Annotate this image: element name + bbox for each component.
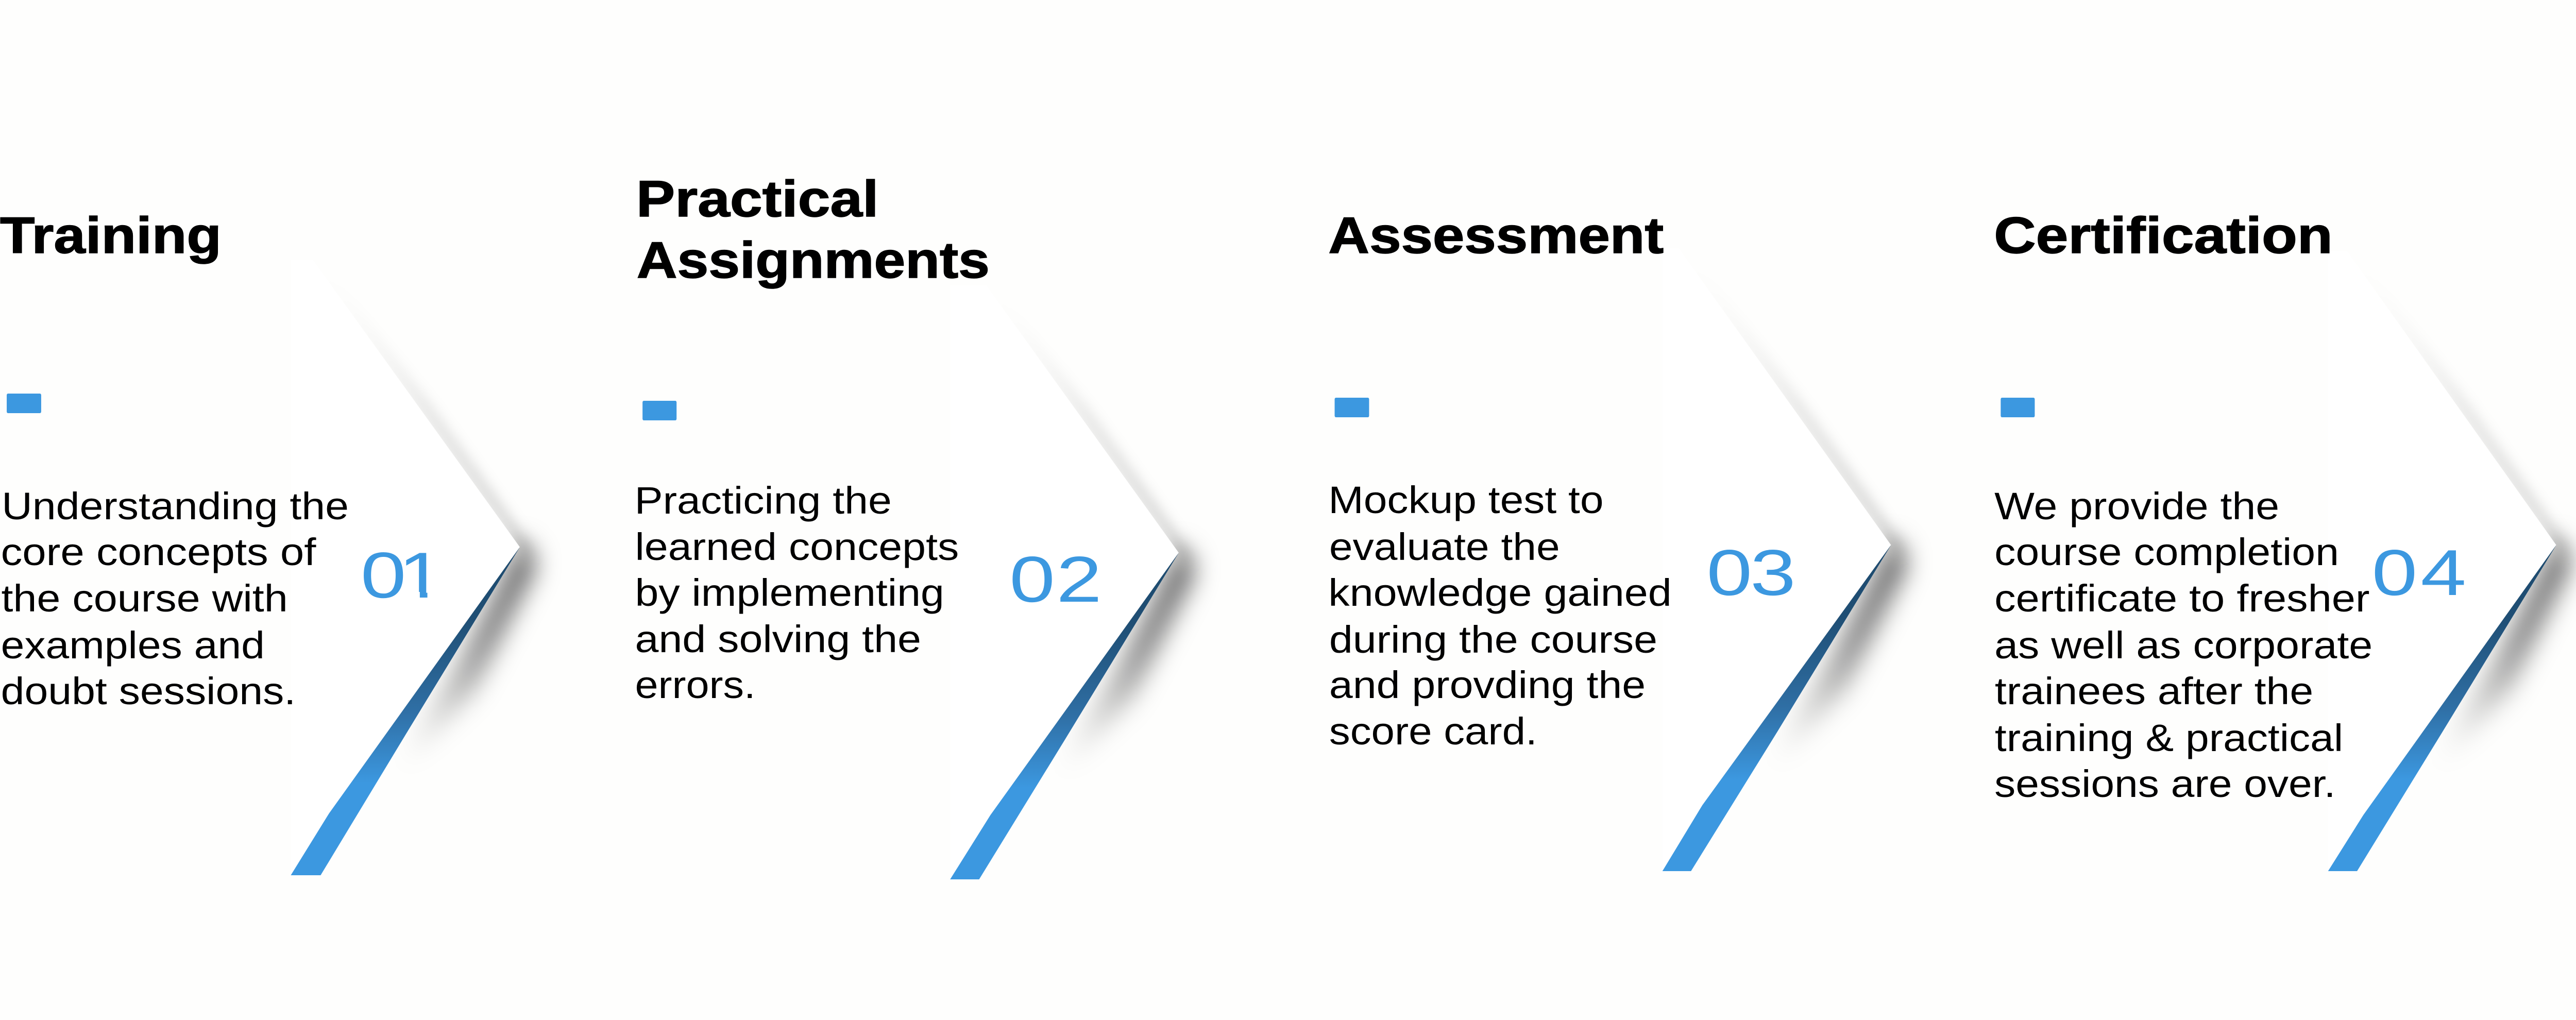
body text 3: Mockup test to: [1328, 479, 1604, 521]
chevron 3 with shadow and blue ribbon: [1663, 248, 1911, 871]
step number 01: 01: [361, 539, 444, 611]
body text 3: knowledge gained: [1328, 572, 1672, 614]
body text 2: Practicing the: [635, 480, 892, 522]
body text 4: We provide the: [1994, 485, 2279, 528]
step number 03: 03: [1706, 537, 1796, 609]
heading: Assessment: Assessment: [1328, 207, 1664, 264]
panel: step 1 training: [0, 207, 540, 875]
heading: Certification: Certification: [1994, 207, 2333, 264]
body text 3: during the course: [1329, 619, 1657, 661]
body text 3: score card.: [1329, 710, 1537, 753]
body text 1: doubt sessions.: [1, 670, 296, 712]
heading: Practical Assignments: [636, 171, 990, 289]
body text 4: [1994, 485, 2372, 805]
body text 3: evaluate the: [1329, 526, 1560, 568]
body text 4: training & practical: [1995, 717, 2343, 759]
accent dash 4: [2001, 398, 2035, 417]
step number 02: 02: [1009, 543, 1102, 616]
panel: step 2 practical assignments: [635, 171, 1199, 879]
body text 2: by implementing: [635, 572, 944, 614]
body text 2: [635, 480, 959, 706]
body text 3: [1328, 479, 1672, 753]
body text 4: as well as corporate: [1994, 624, 2372, 667]
body text 1: [1, 485, 349, 712]
body text 4: course completion: [1994, 531, 2339, 573]
body text 1: examples and: [1, 624, 265, 667]
accent dash 3: [1335, 398, 1369, 417]
accent dash 1: [7, 394, 41, 413]
body text 4: trainees after the: [1995, 670, 2313, 712]
body text 2: and solving the: [635, 618, 921, 660]
body text 4: sessions are over.: [1994, 763, 2335, 805]
body text 3: and provding the: [1329, 664, 1646, 706]
heading: Practical Assignments: Assignments: [637, 232, 990, 289]
body text 1: Understanding the: [2, 485, 349, 528]
body text 2: learned concepts: [635, 526, 959, 568]
step number 04: 04: [2372, 537, 2466, 609]
chevron 4 with shadow and blue ribbon: [2328, 251, 2574, 871]
heading: Training: Training: [0, 207, 222, 264]
body text 1: core concepts of: [1, 531, 316, 573]
body text 1: the course with: [1, 577, 288, 620]
accent dash 2: [642, 401, 676, 420]
panel: step 4 certification: [1994, 207, 2574, 871]
panel: step 3 assessment: [1328, 207, 1911, 871]
heading: Practical Assignments: Practical: [636, 171, 879, 228]
chevron 2 with shadow and blue ribbon: [950, 285, 1199, 879]
body text 4: certificate to fresher: [1994, 577, 2370, 620]
body text 2: errors.: [635, 664, 756, 706]
chevron 1 with shadow and blue ribbon: [291, 260, 540, 875]
